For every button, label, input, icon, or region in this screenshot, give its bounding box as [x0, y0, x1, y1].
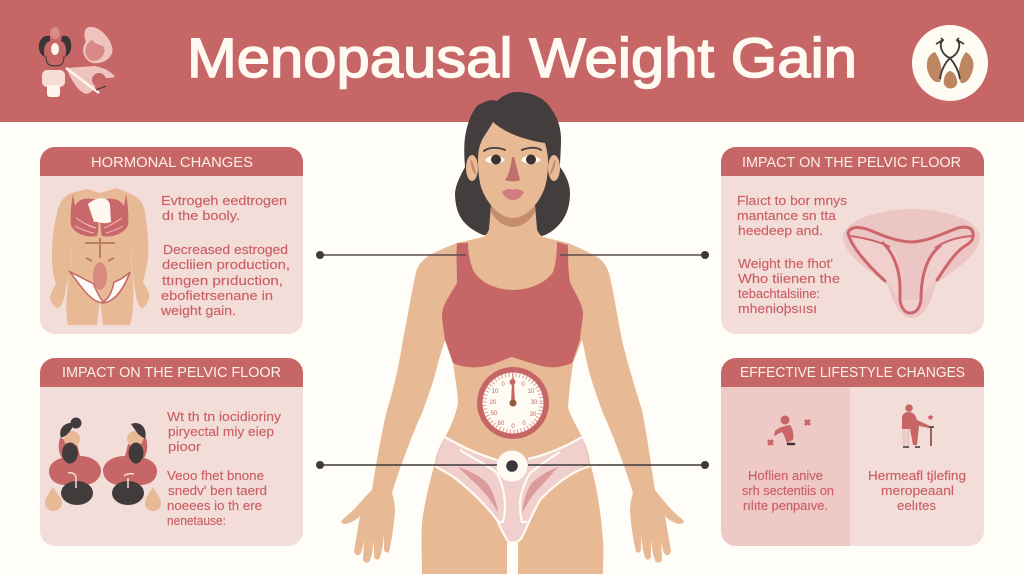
body text: hormone column — [868, 468, 966, 513]
body text: pelvic floor right — [737, 193, 848, 316]
belly scale: 0 — [511, 424, 515, 430]
body text: pelvic floor left — [167, 409, 282, 528]
icon: stethoscope badge — [912, 25, 988, 101]
belly scale: 0 — [501, 382, 505, 388]
nose — [505, 157, 520, 182]
panel heading: pelvic floor right: IMPACT ON THE PELVIC FLOOR — [742, 155, 961, 171]
panel: impact on the pelvic floor (left) — [40, 358, 303, 546]
body text: pelvic floor left: snedv' ben taerd — [168, 483, 267, 498]
body text: pelvic floor right: tebachtalsiine: — [738, 286, 820, 301]
body text: pelvic floor left: pioor — [168, 439, 202, 454]
belly scale — [477, 367, 549, 439]
body text: hormone column: eelıtes — [897, 498, 936, 513]
illustration: pelvic floor muscle — [843, 209, 980, 318]
panel header: lifestyle — [721, 358, 984, 387]
body text: hormonal changes: ttıngen prıduction, — [162, 273, 283, 288]
body text: pelvic floor right: Weight the fhot' — [738, 256, 833, 271]
header banner — [0, 0, 1024, 122]
belly scale: 30 — [531, 400, 538, 406]
neck shadow — [491, 205, 535, 227]
body text: pelvic floor left: piryectal miy eiep — [168, 424, 274, 439]
body text: pelvic floor right: mhenioþsıısı — [738, 301, 817, 316]
belly scale: 30 — [530, 412, 537, 418]
panel header: hormonal changes — [40, 147, 303, 176]
body text: pelvic floor right: Who tiienen the — [738, 271, 840, 286]
body text: hormone column: meropeaanl — [881, 483, 954, 498]
panel heading: lifestyle: EFFECTIVE LIFESTYLE CHANGES — [740, 365, 965, 381]
body text: hormonal changes — [160, 193, 290, 318]
connector: upper right — [560, 251, 709, 259]
illustration: two women figures — [45, 418, 161, 511]
body text: pelvic floor left: Veoo fhet bnone — [167, 468, 264, 483]
body text: hormonal changes: ebofietrsenane in — [161, 288, 273, 303]
body text: hormonal changes: weight gain. — [160, 303, 236, 318]
connector: lower left — [316, 461, 497, 469]
eyebrows — [484, 148, 541, 151]
body — [341, 205, 684, 574]
body text: pelvic floor right: Flaıct to bor mnys — [737, 193, 848, 208]
title: Menopausal Weight Gain — [187, 26, 857, 89]
ears — [466, 155, 478, 181]
panel: effective lifestyle changes — [721, 358, 984, 546]
belly scale: 10 — [492, 389, 499, 395]
panel heading: hormonal changes: HORMONAL CHANGES — [91, 155, 253, 171]
body text: pelvic floor left: Wt th tn iocidioriny — [167, 409, 282, 424]
lips — [502, 189, 524, 200]
eyes — [485, 154, 541, 164]
belly scale: 0 — [521, 382, 525, 388]
body text: exercise column: Hoflien anive — [748, 468, 823, 483]
icon: person exercising — [769, 416, 809, 444]
belly scale: 50 — [491, 411, 498, 417]
body text: hormonal changes: Decreased estroged — [163, 242, 288, 257]
body text: exercise column: srh sectentiis on — [742, 483, 834, 498]
tank top — [442, 242, 583, 367]
underwear — [435, 437, 590, 542]
central figure: woman — [341, 92, 684, 574]
connector: lower right — [528, 461, 709, 469]
panel: impact on the pelvic floor (right) — [721, 147, 984, 334]
body text: pelvic floor left: noeees io th ere — [167, 498, 262, 513]
left column: exercise — [721, 387, 850, 546]
hair — [455, 92, 570, 236]
body text: hormonal changes: dı the booly. — [162, 208, 240, 223]
icon: anatomy cluster — [39, 27, 115, 97]
illustration: torso anatomy — [50, 188, 149, 325]
body text: pelvic floor right: heedeep and. — [738, 223, 823, 238]
belly scale: 10 — [528, 389, 535, 395]
panel: hormonal changes — [40, 147, 303, 334]
body text: exercise column: rılıte penpaıve. — [743, 498, 828, 513]
body text: hormone column: Hermeafl tjlefing — [868, 468, 966, 483]
panel header: pelvic floor right — [721, 147, 984, 176]
icon: elder with cane — [902, 404, 934, 447]
belly scale: 0 — [522, 421, 526, 427]
body text: pelvic floor right: mantance sn tta — [737, 208, 837, 223]
body text: pelvic floor left: nenetause: — [167, 513, 226, 528]
belly scale: 20 — [490, 400, 497, 406]
face — [478, 122, 548, 218]
belly scale: 60 — [498, 421, 505, 427]
connector: upper left — [316, 251, 466, 259]
body text: hormonal changes: decliien production, — [162, 257, 290, 272]
panel heading: pelvic floor left: IMPACT ON THE PELVIC FLOOR — [62, 365, 281, 381]
pelvic marker — [496, 450, 528, 482]
panel header: pelvic floor left — [40, 358, 303, 387]
body text: hormonal changes: Evtrogeh eedtrogen — [161, 193, 287, 208]
body text: exercise column — [742, 468, 834, 513]
